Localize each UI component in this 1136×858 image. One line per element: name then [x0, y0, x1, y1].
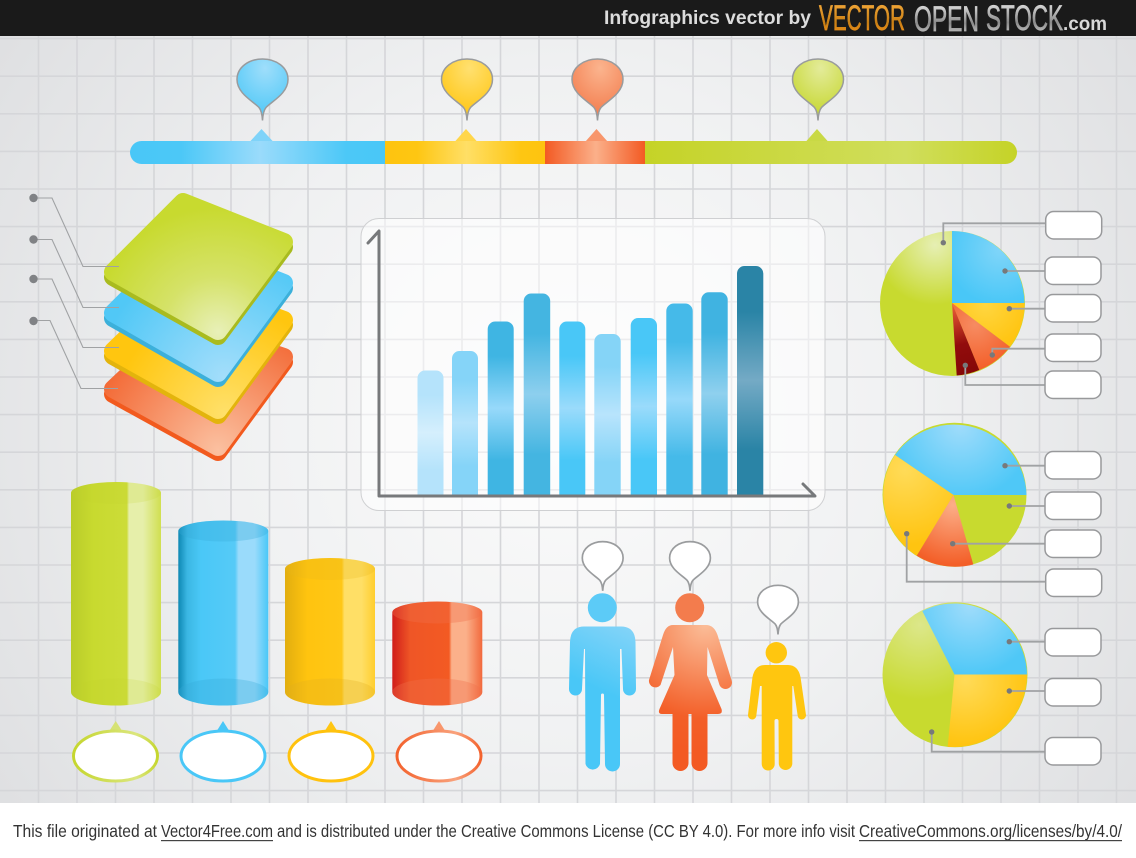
- layer connector dots: [29, 194, 38, 325]
- logo: vector: VECTOR: [819, 0, 905, 38]
- header title: Infographics vector by: [604, 7, 811, 29]
- stacked layers diagram: [29, 194, 284, 452]
- pie 2 slice: blue: [895, 425, 1026, 495]
- pin: yellow: [442, 59, 492, 120]
- chart axes: [368, 231, 815, 496]
- pie 1 slice: dark red: [952, 303, 979, 376]
- cylinders: [71, 482, 482, 706]
- callout: blue: [181, 721, 265, 781]
- figure: child: [748, 642, 806, 771]
- pin: green: [792, 59, 844, 120]
- footer text: intro: This file originated at: [13, 821, 157, 841]
- chart bars: [418, 266, 763, 495]
- pie 3 slice: blue: [922, 603, 1027, 674]
- layer connector lines: [34, 198, 119, 388]
- pie 2 slice: orange: [917, 495, 973, 567]
- pie chart 2: [882, 423, 1102, 596]
- layer: green: [113, 202, 284, 336]
- timeline segment: green: [645, 141, 1017, 164]
- pie 1 slice: green: [880, 231, 1025, 376]
- callout: yellow: [289, 721, 373, 781]
- layer: yellow: [113, 283, 284, 415]
- pie 2 slice: green: [882, 423, 1026, 567]
- timeline: [130, 59, 1017, 164]
- pie 1 label boxes: [1045, 212, 1102, 398]
- cylinder: green: [71, 482, 161, 706]
- pie 1 slice: blue: [952, 231, 1024, 303]
- footer: [0, 803, 1136, 858]
- pin: blue: [237, 59, 288, 120]
- speech bubble: woman: [670, 542, 710, 591]
- pie 1 connectors: [943, 223, 1046, 385]
- pie 3 slice: yellow: [948, 674, 1027, 747]
- figure: man: [569, 593, 636, 772]
- chart panel: [361, 218, 825, 510]
- pin: orange: [572, 59, 623, 120]
- callout: orange: [397, 721, 481, 781]
- pie 3 connector dots: [929, 639, 1012, 735]
- timeline segment: orange: [545, 141, 645, 164]
- pie 3 slice: green: [882, 602, 1028, 747]
- timeline segment: blue: [130, 141, 385, 164]
- cylinder callouts: [74, 721, 481, 781]
- callout: green: [74, 721, 158, 781]
- pie 2 slice: yellow: [883, 455, 954, 556]
- cylinder: blue: [178, 520, 268, 706]
- logo: open: OPEN: [914, 0, 979, 39]
- pie 1 slice: orange: [952, 303, 1010, 370]
- pie 2 connectors: [907, 466, 1046, 582]
- pie 3 label boxes: [1045, 628, 1101, 765]
- timeline pointers: [250, 129, 828, 142]
- pie 2 label boxes: [1045, 452, 1102, 596]
- figure: woman: [649, 593, 732, 771]
- bar chart: [361, 218, 825, 510]
- speech bubble: child: [758, 585, 798, 634]
- cylinder: yellow: [285, 558, 375, 706]
- speech bubble: man: [582, 542, 623, 591]
- pie 2 connector dots: [904, 463, 1012, 546]
- pie 1 connector dots: [941, 240, 1012, 368]
- layer: orange: [113, 323, 284, 452]
- cylinder: red: [392, 602, 482, 706]
- pie 3 connectors: [932, 642, 1046, 752]
- logo: stock: STOCK: [986, 0, 1063, 38]
- pie chart 3: [882, 602, 1101, 765]
- logo: .com: .com: [1063, 14, 1107, 35]
- timeline segment: yellow: [385, 141, 545, 164]
- pie chart 1: [880, 212, 1102, 398]
- people figures: [569, 542, 806, 772]
- layer: blue: [113, 243, 284, 378]
- header bar: [0, 0, 1136, 39]
- footer link: Vector4Free: Vector4Free.com: [161, 821, 273, 841]
- pie 1 slice: yellow: [952, 303, 1025, 347]
- footer text: license: and is distributed under the Creative Commons License (CC BY 4.0). For more info visit: [277, 821, 855, 841]
